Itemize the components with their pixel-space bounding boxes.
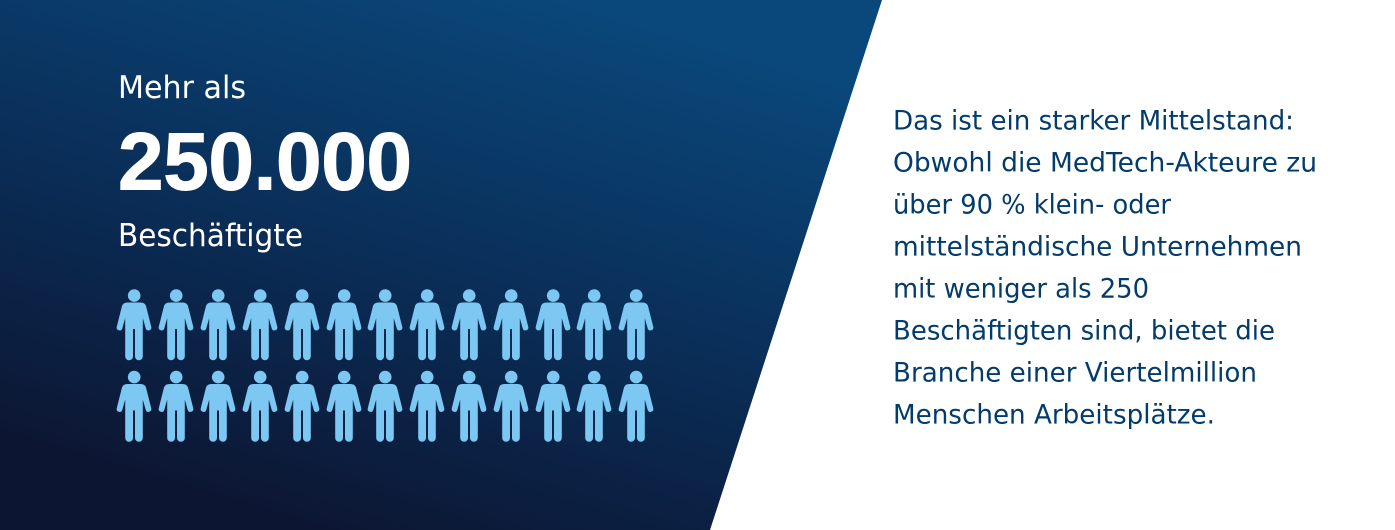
- text block: description: Menschen Arbeitsplätze.: [893, 400, 1215, 430]
- heading: Mehr als: Mehr als: [118, 70, 246, 106]
- text block: description: Obwohl die MedTech-Akteure zu: [893, 148, 1317, 178]
- text block: description: Beschäftigten sind, bietet die: [893, 316, 1275, 346]
- text block: description: Das ist ein starker Mittelstand:: [893, 106, 1294, 136]
- big number: 250.000: 250.000: [118, 116, 412, 208]
- text block: description: über 90 % klein- oder: [893, 190, 1172, 220]
- text block: description: mittelständische Unternehmen: [893, 232, 1302, 262]
- subheading: Beschäftigte: Beschäftigte: [118, 218, 303, 254]
- panel: dark blue slanted background: [0, 0, 882, 530]
- icon row: people, first row: [117, 289, 653, 360]
- text block: description: Branche einer Viertelmillion: [893, 358, 1257, 388]
- text block: description: [893, 106, 1317, 430]
- text block: description: mit weniger als 250: [893, 274, 1149, 304]
- icon row: people, second row: [117, 371, 653, 442]
